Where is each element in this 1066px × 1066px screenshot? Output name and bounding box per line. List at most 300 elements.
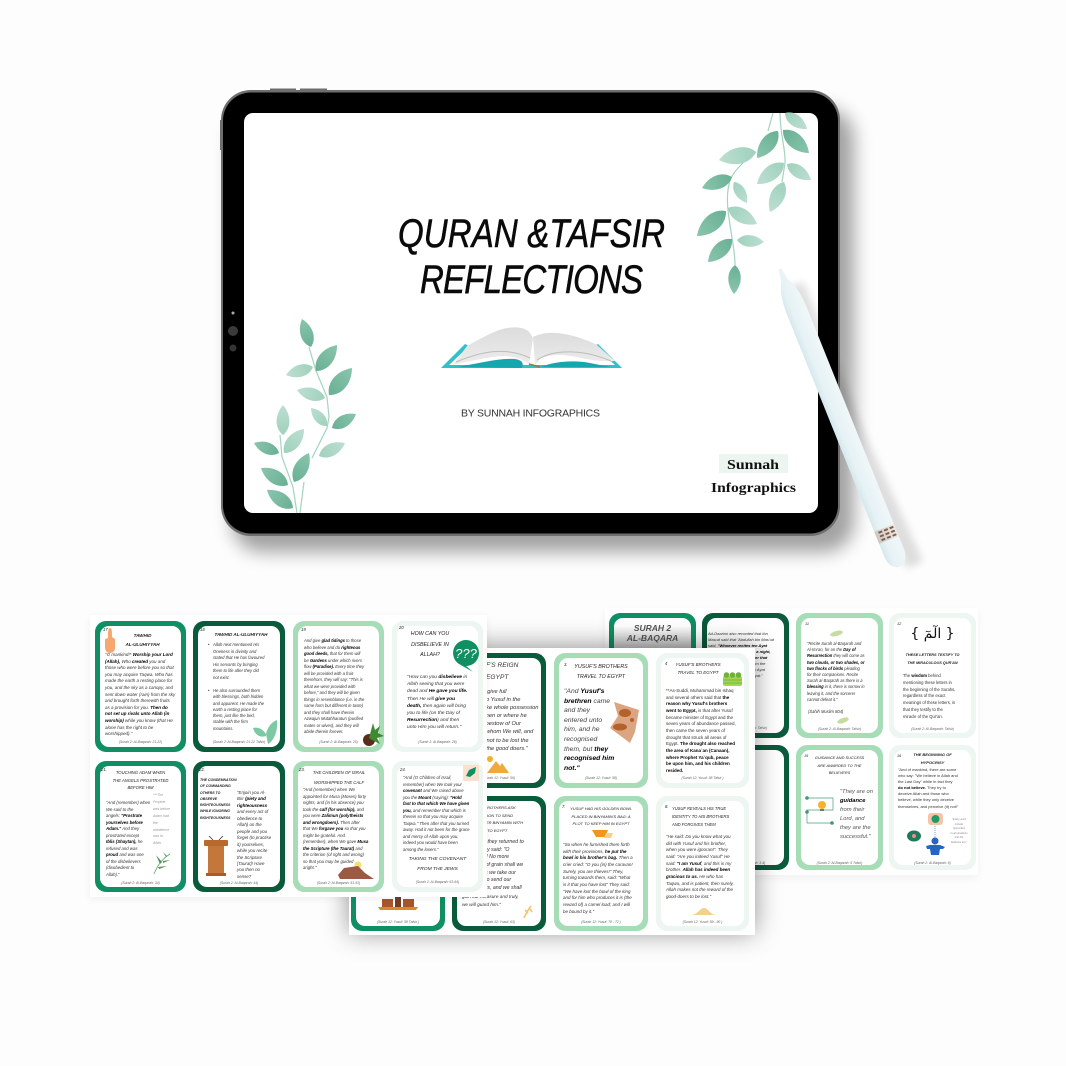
card 18 number: 18: [200, 627, 205, 632]
card 23 number: 23.: [299, 767, 305, 772]
card 17 body: as a provision for you. Then do: [105, 705, 168, 710]
card 19 body: And give glad tidings to those: [304, 638, 361, 643]
card 19 body: good deeds, that for them will: [304, 651, 360, 656]
card 19 body: same form but different in taste): [304, 703, 363, 708]
card 12 number: 12: [897, 622, 901, 626]
card 22 body: it) yourselves,: [237, 842, 264, 847]
card 23: Children of Israil: [293, 761, 384, 892]
card 23 body: [303, 787, 368, 872]
card 4 body: drought that struck all areas of: [666, 735, 727, 740]
card 20 heading: DISBELIEVE IN: [411, 642, 449, 648]
card 14 body: Hereafter.: [708, 842, 726, 847]
card 15 heading: [814, 755, 864, 775]
card 10: Ayat al-Kursi narration: [702, 613, 789, 738]
card 18 second bullet: stable with the firm: [213, 719, 248, 724]
card 12 heading: THE MIRACULOUS QUR'AN: [907, 661, 958, 665]
card 7 body: Surely, you are thieves!" They,: [563, 869, 623, 874]
icon: mountains and sun: [487, 756, 509, 773]
card 21 source: (Surah 2: Al-Baqarah: 34): [121, 881, 160, 885]
card 4 body: **As-Suddi, Muhammad bin Ishaq: [666, 688, 734, 693]
card 16 heading: [913, 752, 952, 765]
card 12 source: (Surah 2: Al-Baqarah: Tafsir): [911, 727, 954, 731]
icon: pale leaf: [830, 630, 843, 636]
card 22 heading: OTHERS TO: [200, 791, 220, 795]
card 18 second bullet: them, just like the bed,: [213, 713, 255, 718]
icon: green butterfly: [253, 720, 278, 744]
card 15 quote: they are the: [840, 825, 871, 831]
card 23 body: "And (remember) when We: [303, 787, 355, 792]
logo: Sunnah Infographics: Sunnah: [727, 458, 779, 473]
card 7 heading: YUSUF HAD HIS GOLDEN BOWL: [570, 806, 632, 811]
sheet: Surah 2 cards 17-24 (front left): [90, 615, 487, 897]
card 12 body: The wisdom behind: [903, 673, 941, 678]
card 10 body: from Surat Al-Baqarah in a night,: [708, 649, 771, 654]
card 22 body: [Taurat]! Have: [237, 861, 264, 866]
card 20 heading: HOW CAN YOU: [411, 631, 449, 637]
card 3 quote: them, but they: [564, 746, 608, 753]
card 15 quote: Lord, and: [840, 816, 864, 822]
card 14 body: and what was: [708, 818, 733, 823]
card 22 body: forget (to practise: [237, 835, 271, 840]
card 21 side note: the: [153, 821, 158, 825]
right leaf branch: [692, 108, 814, 294]
card 11 body: "Recite Surah al-Baqarah and: [807, 641, 861, 646]
icon: wheat: [523, 906, 533, 918]
card 2 body: [461, 689, 538, 752]
card 4 body: became minister of Egypt and the: [666, 715, 733, 720]
card 11: Recite Surah al-Baqarah: [796, 613, 883, 738]
card 22 number: 22.: [199, 767, 205, 772]
card 16 body: [898, 767, 958, 809]
card 17 body: not set up rivals unto Allah (in: [105, 711, 169, 716]
card 21 body: We said to the: [106, 806, 133, 812]
icon: bulb diagram: [805, 796, 834, 825]
tablet mockup with cover slide and pencil: [0, 0, 1066, 600]
card 23 body: you were Zalimun (polytheists: [303, 813, 363, 818]
card 3 quote: and they: [564, 707, 590, 714]
card 11 body: Al-Imran, for on the Day of: [807, 647, 856, 652]
card 18 first bullet: Allah next mentioned His: [213, 642, 259, 647]
card 3 heading: [574, 664, 628, 680]
card 22 heading: RIGHTEOUSNESS: [200, 816, 230, 820]
card 2 body: "Thus We give full: [461, 689, 507, 695]
card 7 body: crier cried: "O you (in) the caravan!: [563, 862, 633, 867]
card 8 heading: IDENTITY TO HIS BROTHERS: [672, 814, 729, 819]
card 11 number: 11: [805, 622, 809, 626]
card 19: Glad tidings: [293, 621, 384, 752]
card 23 source: (Surah 2: Al-Baqarah: 51-53): [317, 881, 360, 885]
card 6 body: him with us, and we shall: [464, 885, 522, 891]
card 21 body: yourselves before: [106, 820, 143, 824]
card 24 body: covenant and We raised above: [403, 788, 464, 793]
card 18 second bullet: with blessings, both hidden: [213, 694, 263, 699]
card 8 body: when you were ignorant". They: [666, 847, 728, 852]
tablet body: [220, 88, 854, 552]
card 10 body: house that night. Four from the: [708, 661, 765, 666]
card 18: Tawhid al-Uluhiyyah tafsir: •: [208, 688, 209, 693]
sheet: Yusuf cards 1-8 (middle): [349, 648, 755, 935]
card 6 body: get unless we take our: [464, 870, 516, 876]
card 14 body: for them, and who: [708, 794, 741, 799]
card 14 body: We have provided: [708, 788, 741, 793]
card 22 heading: OBSERVE: [200, 797, 217, 801]
icon: question speech bubble: ???: [455, 646, 478, 661]
card 2 heading: YUSUF'S REIGN: [468, 662, 518, 669]
card 2 body: Mercy on whom We will, and: [461, 729, 533, 735]
card 3 quote: "And Yusuf's: [564, 688, 604, 695]
card 7 heading: [570, 806, 632, 826]
card 10 body: [708, 631, 774, 678]
card 11 body: for their companions. Recite: [807, 672, 858, 677]
card 23 body: so that you may be guided: [303, 858, 353, 864]
card 7 heading: PLACED IN BINYAMIN'S BAG: A: [571, 814, 631, 818]
card 15 quote: [840, 789, 873, 840]
card 4 number: 4: [665, 661, 667, 666]
card 4 heading: TRAVEL TO EGYPT: [677, 670, 719, 675]
card 8 heading: AND FORGIVES THEM: [672, 822, 716, 827]
card 19 body: who believe and do righteous: [304, 644, 360, 650]
card 20: How can you disbelieve: [392, 621, 483, 752]
card 22 body: Allah) on the: [237, 822, 262, 827]
card 15 quote: guidance: [840, 798, 865, 804]
card 21 heading: THE ANGELS PROSTRATED: [113, 778, 168, 783]
card 11 source: (Surah 2: Al-Baqarah: Tafsir): [818, 727, 861, 731]
card 6 body: we will guard him.": [462, 902, 501, 907]
card 17 body: worship) while you know (that He: [105, 718, 173, 723]
card 17 heading: AL-ULUHIYYAH: [125, 642, 160, 647]
card 22 heading: WHILE IGNORING: [200, 809, 230, 813]
left leaf branch: [252, 317, 359, 514]
card 21 heading: TOUCHING ADAM WHEN: [116, 770, 165, 775]
card 4 body: [666, 688, 736, 773]
card 24 body: remember) when We took your: [403, 782, 462, 786]
card 16 number: 16: [897, 754, 901, 758]
card 22 body: while you recite: [237, 848, 267, 853]
icon: person with speech bubbles: [907, 813, 945, 855]
card 3: Yusuf's brothers travel to Egypt: [554, 653, 648, 788]
icon: peach square with leaf: [463, 765, 479, 781]
card 24 body: fast to that which We have given: [403, 801, 469, 806]
sheet: Surah 2 cards 9-16 (back right): [605, 608, 978, 875]
card 11 body: two flocks of birds pleading: [807, 666, 860, 671]
card 11 body: Resurrection they will come as: [807, 653, 865, 658]
card 18 second bullet: [208, 688, 264, 731]
card 4 body: then came the seven years of: [666, 728, 725, 733]
card 14 body: [708, 764, 753, 848]
card 14: Qualities of the believers: [702, 745, 789, 870]
card 14 source: (Surah 2: Al-Baqarah: 3-4): [726, 861, 765, 865]
card 18 first bullet: His servants by bringing: [213, 662, 258, 666]
card 10 body: Ad-Daarimi also recorded that Ibn: [708, 631, 768, 636]
card 24 body: Taqwa." Then after that you turned: [403, 820, 469, 826]
card 8 body: Taqwa, and is patient, then surely,: [666, 881, 734, 886]
card 19 body: and they shall have therein: [304, 710, 354, 714]
card 16 side note: believers too.": [951, 841, 967, 844]
card 19 body: mates or wives), and they will: [304, 722, 359, 728]
card 24 body: you the Mount (saying): "Hold: [403, 794, 462, 800]
card 17 body: [104, 652, 176, 736]
card 16 body: "And of mankind, there are some: [898, 767, 956, 772]
card 11 body: blessing in it, there is sorrow in: [807, 684, 865, 689]
card 18 second bullet: He also surrounded them: [213, 688, 260, 693]
card 20 body: death, then again will bring: [407, 704, 466, 709]
card 21 body: [106, 800, 150, 878]
card 15 quote: from their: [840, 807, 864, 813]
card 4 body: the area of Kana`an (Canaan),: [666, 748, 730, 753]
card 19 number: 19: [301, 627, 306, 632]
card 20 body: you to life (on the Day of: [407, 711, 460, 716]
card 3 quote: recognised him: [564, 755, 614, 762]
card 21 side note: obedience: [153, 828, 169, 832]
card 11 body: [806, 641, 865, 702]
card 3 quote: [564, 688, 614, 772]
card 6 heading: [459, 805, 524, 832]
card 17 heading: TAWHID: [134, 633, 151, 638]
card 24: Taking the covenant: [392, 761, 483, 892]
card 21 body: refused and was: [106, 846, 138, 850]
card 21 body: Adam." And they: [106, 826, 139, 831]
card 21 side note: was before: [153, 807, 170, 811]
card 19 body: before," and they will be given: [304, 690, 360, 695]
card 21 body: of the disbelievers: [106, 858, 141, 864]
card 10 body: first part, Ayat Al-Kursi, two Ayat: [708, 667, 765, 672]
card 22 heading: OF COMMANDING: [200, 784, 231, 788]
card 22 body: sense?: [237, 874, 251, 879]
card 7 number: 7.: [562, 804, 566, 809]
card 7 body: bowl in his brother's bag. Then a: [563, 855, 633, 860]
card 16: Beginning of hypocrisy: [889, 745, 976, 870]
card 23 body: might be grateful. And: [303, 832, 345, 838]
card 18 source: (Surah 2: Al-Baqarah: 21-22 Tafsir): [213, 740, 265, 744]
card 14 body: revealed before: [708, 824, 736, 829]
card 3 quote: him, and he: [564, 726, 600, 733]
card 18 first bullet: them to life after they did: [213, 668, 259, 673]
card 22 heading: THE CONDEMNATION: [200, 778, 237, 782]
card 19 body: what we were provided with: [304, 684, 355, 688]
card 21 body: angels: "Prostrate: [106, 813, 142, 818]
icon: golden bowl: [592, 830, 613, 838]
card 6 source: (Surah 12: Yusuf: 63): [483, 920, 515, 924]
card 16 side note: "Every word: [952, 818, 966, 821]
card 24 body: indeed you would have been: [403, 840, 458, 845]
card 4 body: reason why Yusuf's brothers: [666, 701, 727, 706]
card 3 heading: TRAVEL TO EGYPT: [577, 674, 625, 680]
card 12: Letters testify to the Quran: [889, 613, 976, 738]
card 11 body: Surah al-Baqarah as there is a: [807, 678, 863, 683]
card 21 side note: Adam had: [153, 814, 169, 818]
card 21 heading: [95, 769, 186, 792]
card 22: Condemnation: [193, 761, 285, 892]
card 8 source: (Surah 12: Yusuf: 89 - 90 ): [683, 920, 722, 924]
icon: sand dune: [692, 908, 715, 915]
card 21 side note: was to: [153, 834, 163, 838]
card 11 body: leaving it, and the sorcerer: [807, 691, 855, 696]
card 16 body: the Last Day" while in fact they: [898, 779, 953, 784]
card 8 body: gracious to us. He who has: [666, 874, 723, 879]
card 9: Surah 2 title: [609, 613, 696, 738]
card 4 body: and several others said that the: [666, 695, 729, 700]
card 5: Tafsir with golden icon: [351, 796, 445, 931]
card 24 body: therein so that you may acquire: [403, 814, 463, 819]
card 2: Yusuf's reign in Egypt: [452, 653, 546, 788]
card 10 body: after it and the last three Ayat.": [708, 673, 763, 678]
card 21 number: 21.: [101, 767, 107, 772]
card 17 body: you may acquire Taqwa. Who has: [105, 672, 173, 677]
card 2 heading: [468, 662, 518, 681]
card 24 body: [403, 775, 470, 853]
card 20 body: "How can you disbelieve in: [407, 675, 467, 680]
card 7: The golden bowl: [554, 796, 648, 931]
card 23 body: appointed for Musa (Moses) forty: [303, 794, 366, 798]
icon: wooden podium: [204, 833, 228, 877]
card 18 second bullet: and apparent. He made the: [213, 701, 264, 706]
card 16 side note: in all situations: [950, 832, 968, 835]
icon: rocks and sun: [338, 861, 374, 880]
icon: olive branch: [153, 852, 171, 874]
card 23 body: aright.": [303, 865, 316, 870]
card 11 hadith reference: (Sahih Muslim 804): [808, 709, 843, 714]
card 4: Brothers travel, tafsir: [656, 653, 749, 788]
card 14 body: faith in the: [708, 836, 727, 841]
card 12 body: miracle of the Qur'an.: [903, 714, 943, 719]
card 22 body: righteousness: [237, 803, 267, 808]
card 23 heading: WORSHIPPED THE CALF: [314, 780, 364, 785]
card 19 body: things in resemblance (i.e. in the: [304, 696, 364, 702]
card 21 side note: ***The: [153, 793, 163, 797]
card 4 heading: YUSUF'S BROTHERS: [675, 662, 721, 667]
card 10 source: (Surah 2: Al-Baqarah: Tafsir): [724, 726, 767, 730]
card 7 body: turning towards them, said: "What: [563, 875, 630, 880]
card 12 heading: [906, 653, 960, 665]
card 4 body: resided.: [666, 768, 683, 773]
card 24 body: away. Had it not been for the grace: [403, 827, 470, 832]
card 2 body: land, to take whole possession: [461, 705, 538, 711]
card 16 body: believe, while they only deceive: [898, 797, 954, 802]
card 18 second bullet: earth a resting place for: [213, 707, 257, 712]
card 22 body: Birr (piety and: [237, 796, 266, 801]
card 17 heading: [125, 633, 160, 647]
card 17 body: you, and the sky as a canopy, and: [105, 685, 173, 690]
icon: small leaf: [837, 717, 849, 724]
card 22 body: people and you: [237, 829, 267, 834]
card 23 heading: THE CHILDREN OF ISRAIL: [313, 770, 365, 775]
card 17 body: those who were before you so that: [105, 665, 174, 670]
card 12 heading: THESE LETTERS TESTIFY TO: [906, 653, 959, 657]
card 18 first bullet: stated that He has favoured: [213, 655, 264, 660]
card 22 heading: [200, 777, 237, 821]
card 10 body: then Shaytan will not enter that: [708, 655, 767, 660]
card 24 heading: TAKING THE COVENANT: [409, 857, 466, 862]
card 12 body: [903, 673, 956, 719]
card 21 body: prostrated except: [106, 832, 139, 838]
card 6 heading: THEM TO EGYPT: [475, 828, 507, 832]
card 8 number: 8.: [665, 804, 668, 809]
card 23 body: and wrongdoers). Then after: [303, 820, 360, 824]
card 17 body: worshipped).": [105, 731, 132, 736]
card 6 body: our father! No more: [464, 854, 509, 860]
card 2 heading: IN EGYPT: [478, 674, 508, 681]
card 24 body: and mercy of Allah upon you,: [403, 834, 458, 838]
card 17 body: (Allah), Who created you and: [105, 659, 165, 664]
icon: pointing finger: [105, 628, 115, 653]
card 8: Yusuf reveals his identity: [656, 796, 749, 931]
card 21 side note: [153, 792, 170, 847]
card 3 source: (Surah 12: Yusuf: 58): [585, 776, 617, 780]
card 2 body: therein, when or where he: [461, 713, 527, 719]
card 16 body: who say: "We believe in Allah and: [898, 773, 958, 778]
card 4 body: went to Egypt, is that after Yusuf: [666, 708, 733, 713]
card 24 source: (Surah 2: Al-Baqarah: 63-64): [416, 880, 459, 884]
card 7 heading: PLOT TO KEEP HIM IN EGYPT: [573, 821, 629, 826]
card 18: Tawhid al-Uluhiyyah tafsir: •: [208, 642, 209, 647]
card 9 heading: AL-BAQARA: [627, 633, 678, 643]
card 8 body: Allah makes not the reward of the: [666, 887, 733, 892]
card 18 first bullet: [208, 642, 265, 680]
card 6 body: father, they said: "O: [464, 847, 509, 853]
card 7 body: reward of) a camel load; and I will: [563, 902, 630, 907]
logo: Sunnah Infographics: [711, 454, 797, 496]
card 12 body: meanings of these letters, is: [903, 700, 955, 705]
card 23 body: took the calf (for worship), and: [303, 806, 364, 812]
Arabic letters heading: { الٓمٓ }: [910, 626, 955, 642]
icon: green trees: [723, 672, 742, 686]
card 21 side note: Allah.: [153, 841, 162, 845]
card 22 body: the Scripture: [237, 855, 262, 860]
card 4 body: Egypt. The drought also reached: [666, 741, 735, 746]
card 2 body: authority to Yusuf in the: [461, 697, 520, 703]
card 7 body: be bound by it.": [563, 909, 594, 914]
card 16 source: (Surah 2: Al-Baqarah: 8): [914, 861, 951, 865]
card 15: Guidance and success: [796, 745, 883, 870]
card 23 body: nights, and (in his absence) you: [303, 800, 364, 805]
card 7 body: is it that you have lost" They said:: [563, 882, 630, 887]
card 9 heading: [626, 623, 678, 643]
card 21 side note: Prophet: [153, 800, 165, 804]
card 18 heading: TAWHID AL-ULUHIYYAH: [214, 632, 268, 637]
card 23 body: the Scripture (the Taurat) and: [303, 846, 363, 850]
card 7 body: "So when he furnished them forth: [563, 842, 630, 847]
icon: map of Egypt: [610, 702, 639, 743]
card 21 body: (disobedient to: [106, 865, 134, 870]
card 16 heading: HYPOCRISY: [921, 760, 944, 765]
card 2 source: (Surah 12: Yusuf: 56): [483, 776, 515, 780]
card 20 body: Allah seeing that you were: [407, 682, 464, 687]
icon: potted plant: [363, 723, 384, 747]
card 15 quote: successful.": [840, 834, 871, 840]
card 17 source: (Surah 2: Al-Baqarah: 21-22): [119, 740, 162, 744]
card 14 body: Those who believe in the: [708, 764, 753, 769]
card 6 body: measure of grain shall we: [464, 862, 523, 868]
card 22 body: obedience to: [237, 816, 262, 821]
card 7 source: (Surah 12: Yusuf: 70 - 72 ): [581, 920, 621, 924]
card 18: Tawhid al-Uluhiyyah tafsir: [193, 621, 285, 752]
card 8 body: said: "I am Yusuf, and this is my: [666, 861, 731, 866]
card 8 body: said: "Are you indeed Yusuf" He: [666, 854, 730, 859]
card 17 body: and brought forth therewith fruits: [105, 698, 170, 703]
card 11 body: cannot defeat it.": [807, 697, 838, 702]
card 17 body: sent down water (rain) from the sky: [105, 692, 175, 697]
card 8 heading: [672, 806, 730, 827]
card 11 body: two clouds, or two shades, or: [807, 660, 865, 665]
card 12 body: mentioning these letters in: [903, 680, 952, 685]
card 2 body: likes. We bestow of Our: [461, 721, 521, 727]
icon: brown book and cup: [378, 897, 418, 910]
card 17 body: made the earth a resting place for: [105, 678, 172, 683]
card 16 side note: [950, 818, 968, 844]
card 22 body: you then no: [237, 867, 260, 872]
card 4 source: (Surah 12: Yusuf: 58 Tafsir ): [681, 776, 724, 780]
card 6 body: brother. So send our: [464, 877, 511, 883]
